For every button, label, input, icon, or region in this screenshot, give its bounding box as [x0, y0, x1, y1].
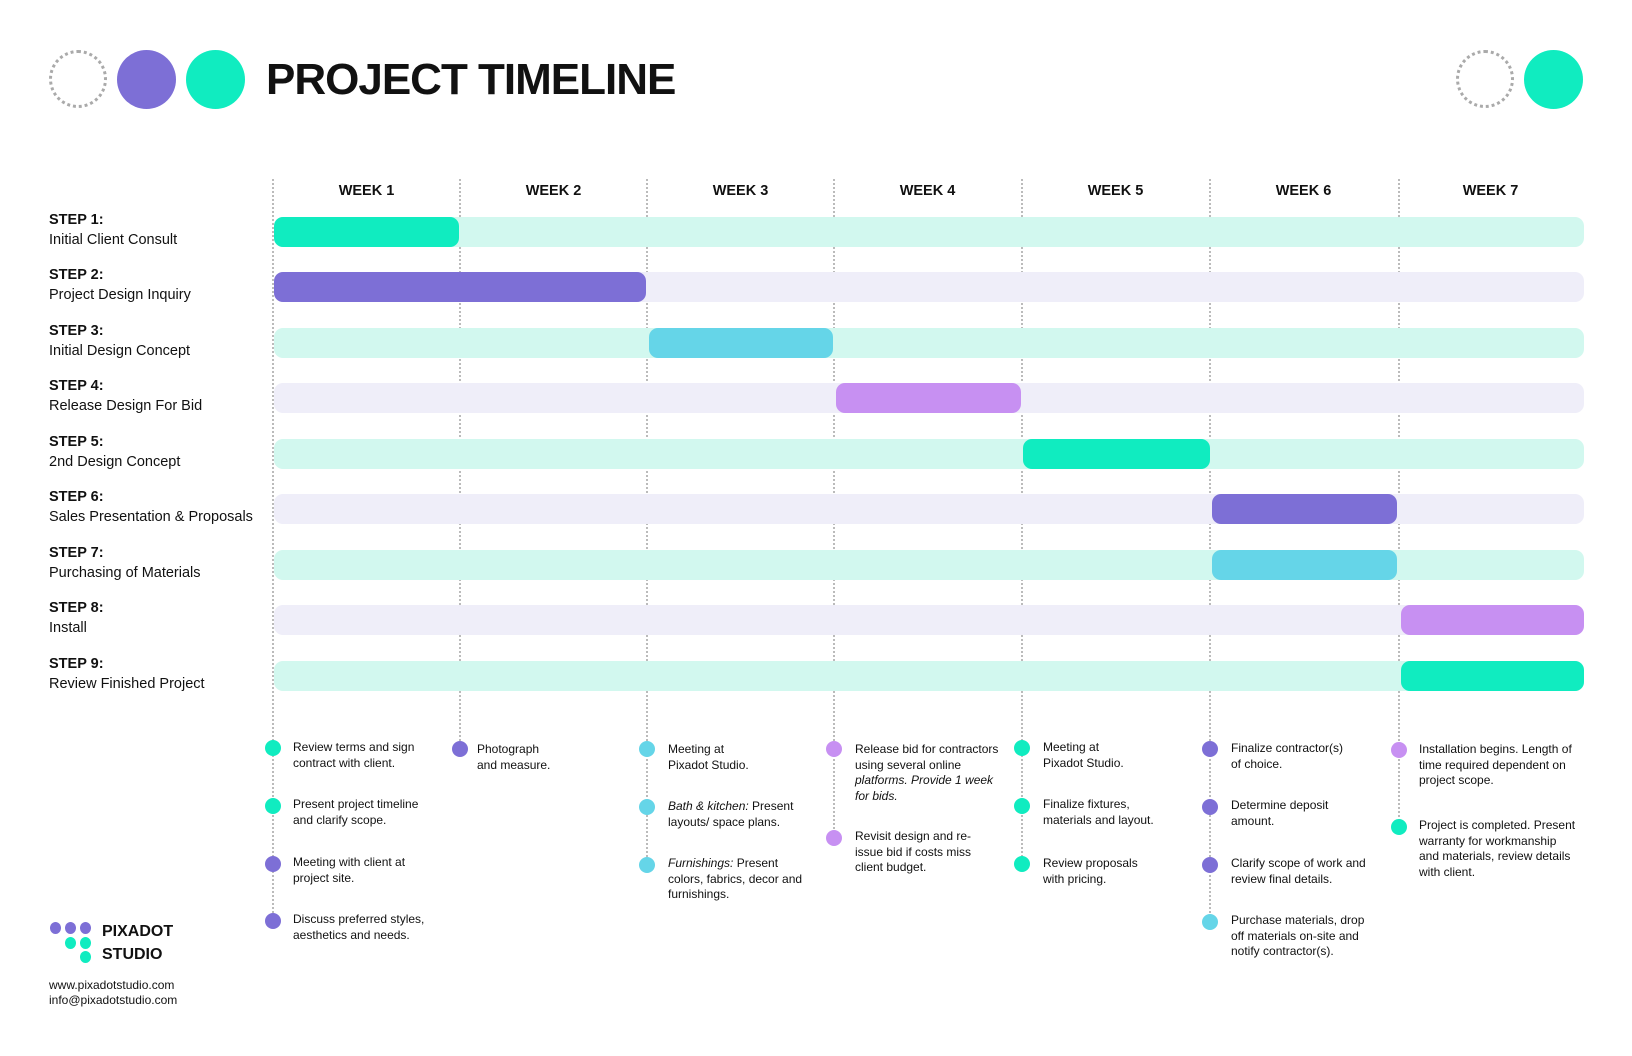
notes week 5: Review proposals with pricing.	[1043, 856, 1138, 886]
notes week 3: Pixadot Studio.	[668, 758, 749, 772]
step labels: Release Design For Bid	[49, 398, 202, 414]
notes week 2	[452, 741, 550, 772]
notes week 3	[639, 741, 802, 901]
week headers: WEEK 4	[900, 183, 955, 199]
step labels: Project Design Inquiry	[49, 287, 191, 303]
notes week 1: Review terms and sign contract with client.	[293, 740, 414, 770]
gantt chart	[274, 217, 1584, 691]
step labels: STEP 4:	[49, 378, 104, 394]
logo: PIXADOT	[102, 923, 173, 940]
step labels: STEP 8:	[49, 600, 104, 616]
step labels: 2nd Design Concept	[49, 454, 180, 470]
step labels: STEP 1:	[49, 212, 104, 228]
step labels: Initial Client Consult	[49, 232, 177, 248]
notes week 6	[1202, 741, 1366, 958]
notes week 4: Revisit design and re-issue bid if costs miss client budget.	[855, 829, 971, 874]
week headers: WEEK 1	[339, 183, 394, 199]
step labels: Install	[49, 620, 87, 636]
step labels: STEP 9:	[49, 656, 104, 672]
week headers: WEEK 7	[1463, 183, 1518, 199]
notes week 3: Furnishings: Present colors, fabrics, decor and furnishings.	[668, 856, 802, 901]
notes week 2: and measure.	[477, 758, 550, 772]
notes week 2: Photograph	[477, 742, 539, 756]
notes week 6: Clarify scope of work and review final details.	[1231, 856, 1366, 886]
notes week 3: Bath & kitchen: Present layouts/ space plans.	[668, 799, 793, 828]
step labels: Sales Presentation & Proposals	[49, 509, 253, 525]
title: PROJECT TIMELINE	[266, 55, 675, 104]
week headers	[338, 183, 1518, 199]
step labels: STEP 5:	[49, 434, 104, 450]
step labels: STEP 6:	[49, 489, 104, 505]
week headers: WEEK 5	[1088, 183, 1143, 199]
notes week 6: Purchase materials, drop off materials on-site and notify contractor(s).	[1231, 913, 1364, 958]
week headers: WEEK 6	[1276, 183, 1331, 199]
logo	[50, 922, 173, 963]
step labels	[49, 212, 253, 692]
step labels: Initial Design Concept	[49, 343, 190, 359]
step labels: STEP 7:	[49, 545, 104, 561]
step labels: STEP 2:	[49, 267, 104, 283]
step labels: STEP 3:	[49, 323, 104, 339]
contact: info@pixadotstudio.com	[49, 993, 177, 1007]
notes week 6: Determine deposit amount.	[1231, 798, 1328, 828]
notes week 3: Meeting at	[668, 742, 724, 756]
notes week 5: Pixadot Studio.	[1043, 756, 1124, 770]
contact	[49, 978, 177, 1007]
notes week 1: Present project timeline and clarify scope.	[293, 797, 418, 826]
notes week 7: Installation begins. Length of time required dependent on project scope.	[1419, 742, 1572, 787]
notes week 4	[826, 741, 998, 874]
notes week 1	[265, 740, 424, 942]
notes week 6: Finalize contractor(s)	[1231, 741, 1343, 755]
notes week 1: Meeting with client at project site.	[293, 855, 405, 884]
week headers: WEEK 2	[526, 183, 581, 199]
logo: STUDIO	[102, 946, 162, 963]
header circles right	[1456, 50, 1583, 109]
notes week 4: Release bid for contractors using several online platforms. Provide 1 week for bids.	[855, 742, 998, 802]
notes week 7	[1391, 742, 1575, 878]
step labels: Purchasing of Materials	[49, 565, 201, 581]
notes week 5	[1014, 740, 1154, 886]
notes week 7: Project is completed. Present warranty for workmanship and materials, review details with client.	[1419, 818, 1575, 878]
step labels: Review Finished Project	[49, 676, 205, 692]
header circles left	[49, 50, 245, 109]
contact: www.pixadotstudio.com	[49, 978, 174, 992]
notes week 1: Discuss preferred styles, aesthetics and needs.	[293, 912, 424, 942]
notes week 5: Meeting at	[1043, 740, 1099, 754]
notes week 5: Finalize fixtures, materials and layout.	[1043, 797, 1154, 826]
week headers: WEEK 3	[713, 183, 768, 199]
notes week 6: of choice.	[1231, 756, 1282, 770]
